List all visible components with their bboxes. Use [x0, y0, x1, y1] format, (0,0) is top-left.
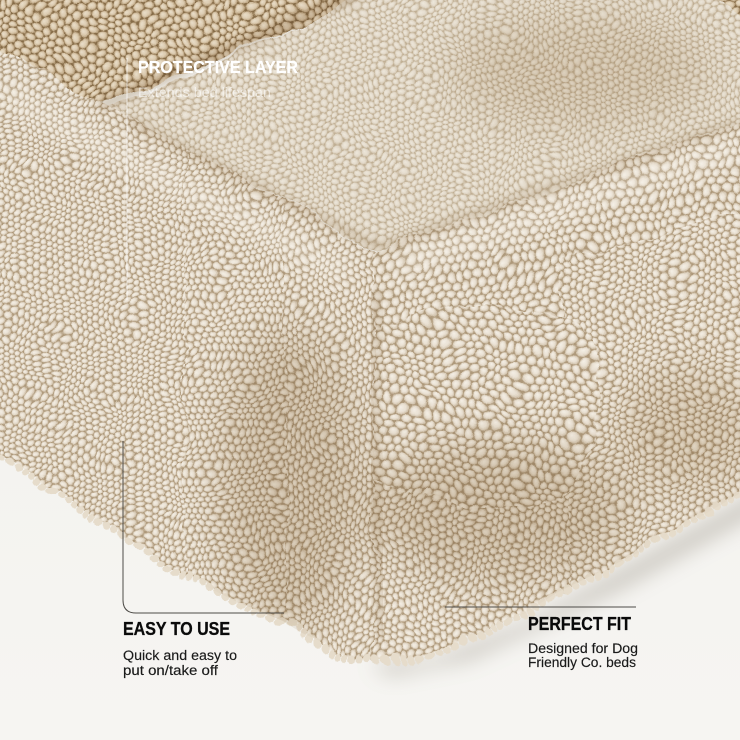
right wall: upper strands [374, 108, 740, 380]
description: Extends bed lifespan [138, 85, 271, 100]
callout: easy to use [123, 441, 284, 678]
right wall: lower strands [374, 470, 570, 662]
scalloped bottom edge tufts [0, 445, 740, 663]
description: put on/take off [123, 663, 218, 678]
bed shadow on floor [370, 490, 740, 676]
heading: PROTECTIVE LAYER [138, 57, 298, 77]
seams between cushion and bolsters [100, 0, 740, 248]
right wall: round tufts [374, 305, 598, 508]
right wall: right strands [560, 200, 740, 592]
heading: EASY TO USE [123, 618, 230, 639]
soft shading [100, 0, 740, 640]
lighter top of bolsters [0, 90, 740, 275]
left wall: corner strands [285, 202, 380, 664]
leader line [126, 58, 128, 300]
back left bolster [0, 0, 460, 108]
central cushion [110, 0, 740, 250]
callout: perfect fit [445, 607, 638, 670]
wall shading [220, 15, 740, 630]
description: Designed for Dog [528, 641, 638, 656]
description: Friendly Co. beds [528, 655, 636, 670]
leader line [123, 441, 284, 613]
corner crease [372, 290, 382, 640]
callout: protective layer [127, 57, 298, 300]
left wall: outer strands [0, 30, 190, 582]
back right bolster [640, 0, 740, 50]
left wall: middle strands [185, 148, 290, 632]
leader line [445, 606, 636, 608]
heading: PERFECT FIT [528, 613, 632, 634]
description: Quick and easy to [123, 648, 237, 663]
